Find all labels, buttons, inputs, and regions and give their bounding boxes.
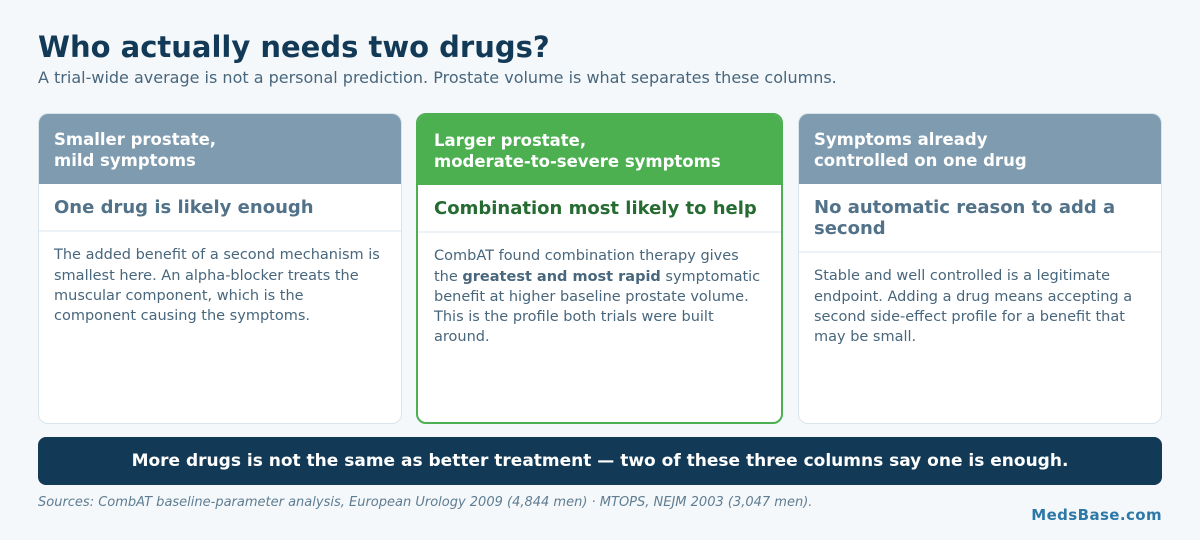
body text: one drug: smallest here. An alpha-blocker treats the [54,268,359,284]
sources: Sources: CombAT baseline-parameter analysis, European Urology 2009 (4,844 men) · MTOPS, NEJM 2003 (3,047 men). [38,495,812,510]
verdict: no automatic reason [814,197,1115,239]
body text: one drug [54,247,380,324]
panel header: larger prostate: moderate-to-severe symptoms [434,152,721,171]
body text: no automatic reason: may be small. [814,329,916,345]
body text: combination [434,248,760,345]
panel header: smaller prostate [39,114,401,184]
body text: combination: the greatest and most rapid symptomatic [434,269,760,285]
body text: one drug: muscular component, which is the [54,288,304,304]
panel header: already controlled: controlled on one drug [814,151,1027,170]
body text: combination: benefit at higher baseline prostate volume. [434,289,749,305]
body text: one drug: The added benefit of a second mechanism is [54,247,380,263]
body text: no automatic reason: Stable and well controlled is a legitimate [814,268,1110,284]
body text: combination: This is the profile both trials were built [434,309,714,325]
verdict: combination: Combination most likely to help [434,198,757,219]
body text: one drug: component causing the symptoms. [54,308,310,324]
panel: larger prostate [416,113,783,424]
panel header: already controlled: Symptoms already [814,130,987,149]
verdict: no automatic reason: second [814,218,886,239]
takeaway banner [38,437,1162,485]
panel header: larger prostate [418,115,781,185]
brand: MedsBase.com [1031,506,1162,524]
body text: no automatic reason: second side-effect profile for a benefit that [814,309,1125,325]
panel header: smaller prostate: mild symptoms [54,151,196,170]
body text: no automatic reason: endpoint. Adding a drug means accepting a [814,289,1132,305]
panel: smaller prostate [38,113,402,424]
subtitle: A trial-wide average is not a personal prediction. Prostate volume is what separates these columns. [38,68,837,87]
verdict: no automatic reason: No automatic reason to add a [814,197,1115,218]
panel header: smaller prostate: Smaller prostate, [54,130,216,149]
panel: already controlled [798,113,1162,424]
body text: no automatic reason [814,268,1132,345]
title: Who actually needs two drugs? [38,30,550,64]
body text: combination: CombAT found combination therapy gives [434,248,739,264]
takeaway banner: More drugs is not the same as better treatment — two of these three columns say one is enough. [132,451,1068,471]
verdict: one drug: One drug is likely enough [54,197,314,218]
panel header: larger prostate: Larger prostate, [434,131,586,150]
body text: combination: around. [434,329,490,345]
panel header: already controlled [799,114,1161,184]
